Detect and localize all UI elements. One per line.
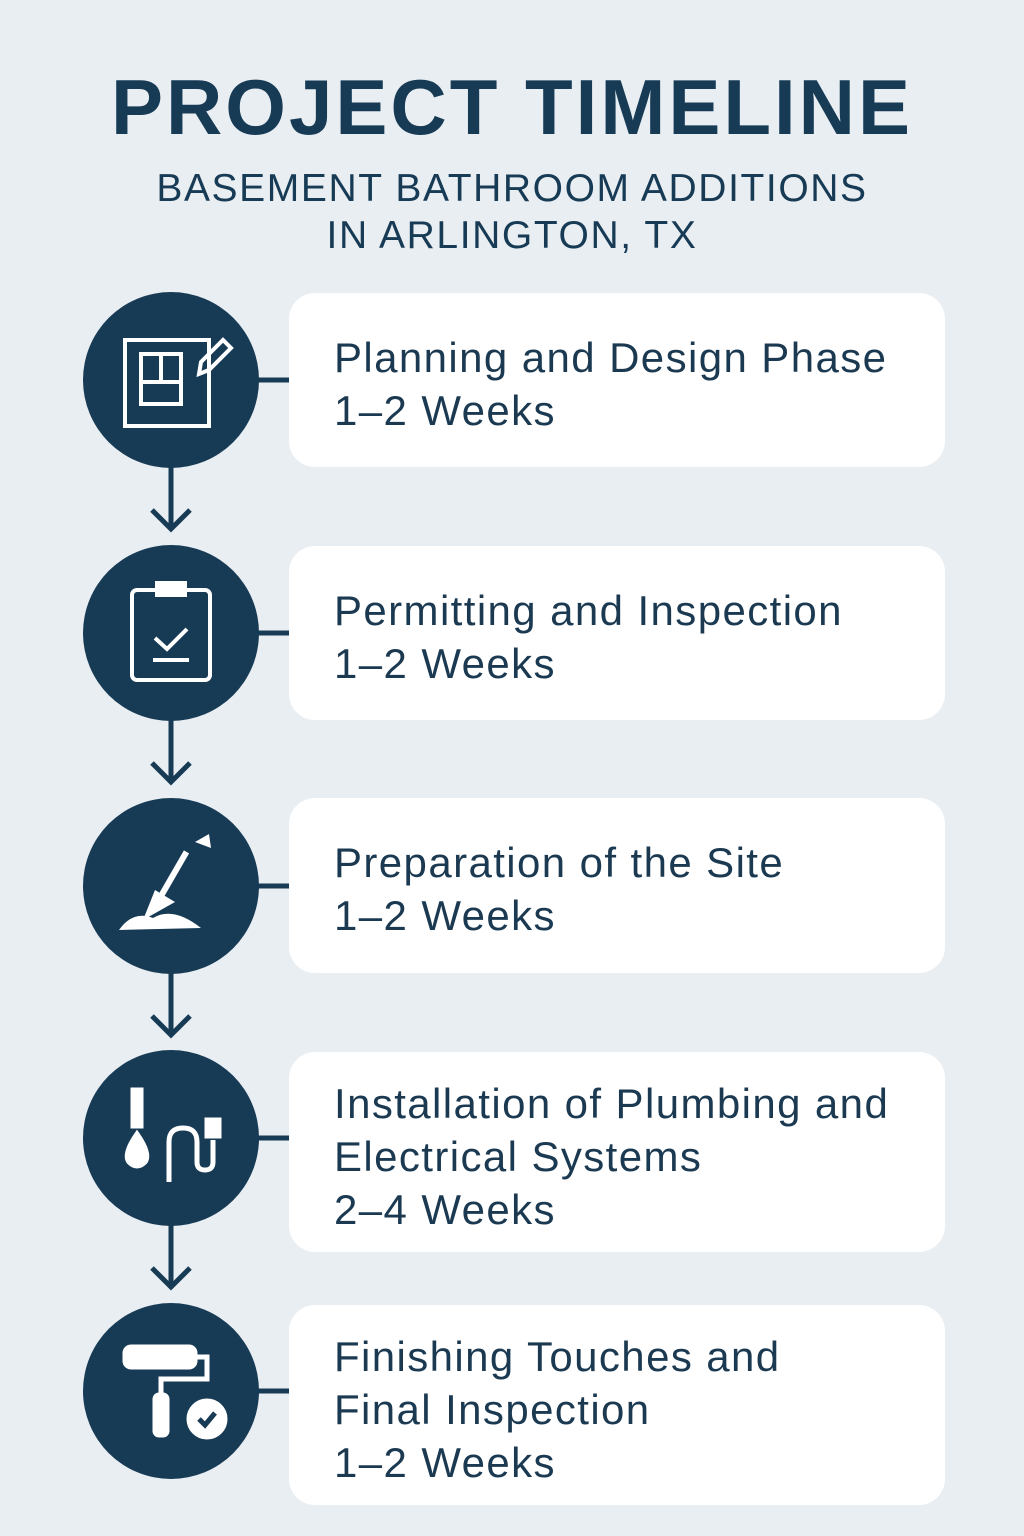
title: PROJECT TIMELINE <box>111 63 913 151</box>
card 4: Electrical Systems <box>334 1133 702 1180</box>
icon: plumbing and electrical <box>83 1050 259 1226</box>
subtitle: IN ARLINGTON, TX <box>327 214 697 257</box>
card 2: 1–2 Weeks <box>334 640 556 687</box>
card 1: 1–2 Weeks <box>334 387 556 434</box>
icon: clipboard <box>83 545 259 721</box>
card 4: Installation of Plumbing and <box>334 1080 889 1127</box>
card 2 <box>289 546 945 720</box>
card 4: 2–4 Weeks <box>334 1186 556 1233</box>
card 3 <box>289 798 945 973</box>
card 2: Permitting and Inspection <box>334 587 843 634</box>
subtitle <box>156 167 868 257</box>
card 5: Finishing Touches and <box>334 1333 781 1380</box>
card 5: 1–2 Weeks <box>334 1439 556 1486</box>
card 4 <box>289 1052 945 1252</box>
card 3: 1–2 Weeks <box>334 892 556 939</box>
icon: paint roller <box>83 1303 259 1479</box>
icon: shovel <box>83 798 259 974</box>
icon: blueprint <box>83 292 259 468</box>
card 1 <box>289 293 945 467</box>
card 1: Planning and Design Phase <box>334 334 887 381</box>
card 3: Preparation of the Site <box>334 839 784 886</box>
subtitle: BASEMENT BATHROOM ADDITIONS <box>156 167 868 210</box>
card 5 <box>289 1305 945 1505</box>
card 5: Final Inspection <box>334 1386 651 1433</box>
